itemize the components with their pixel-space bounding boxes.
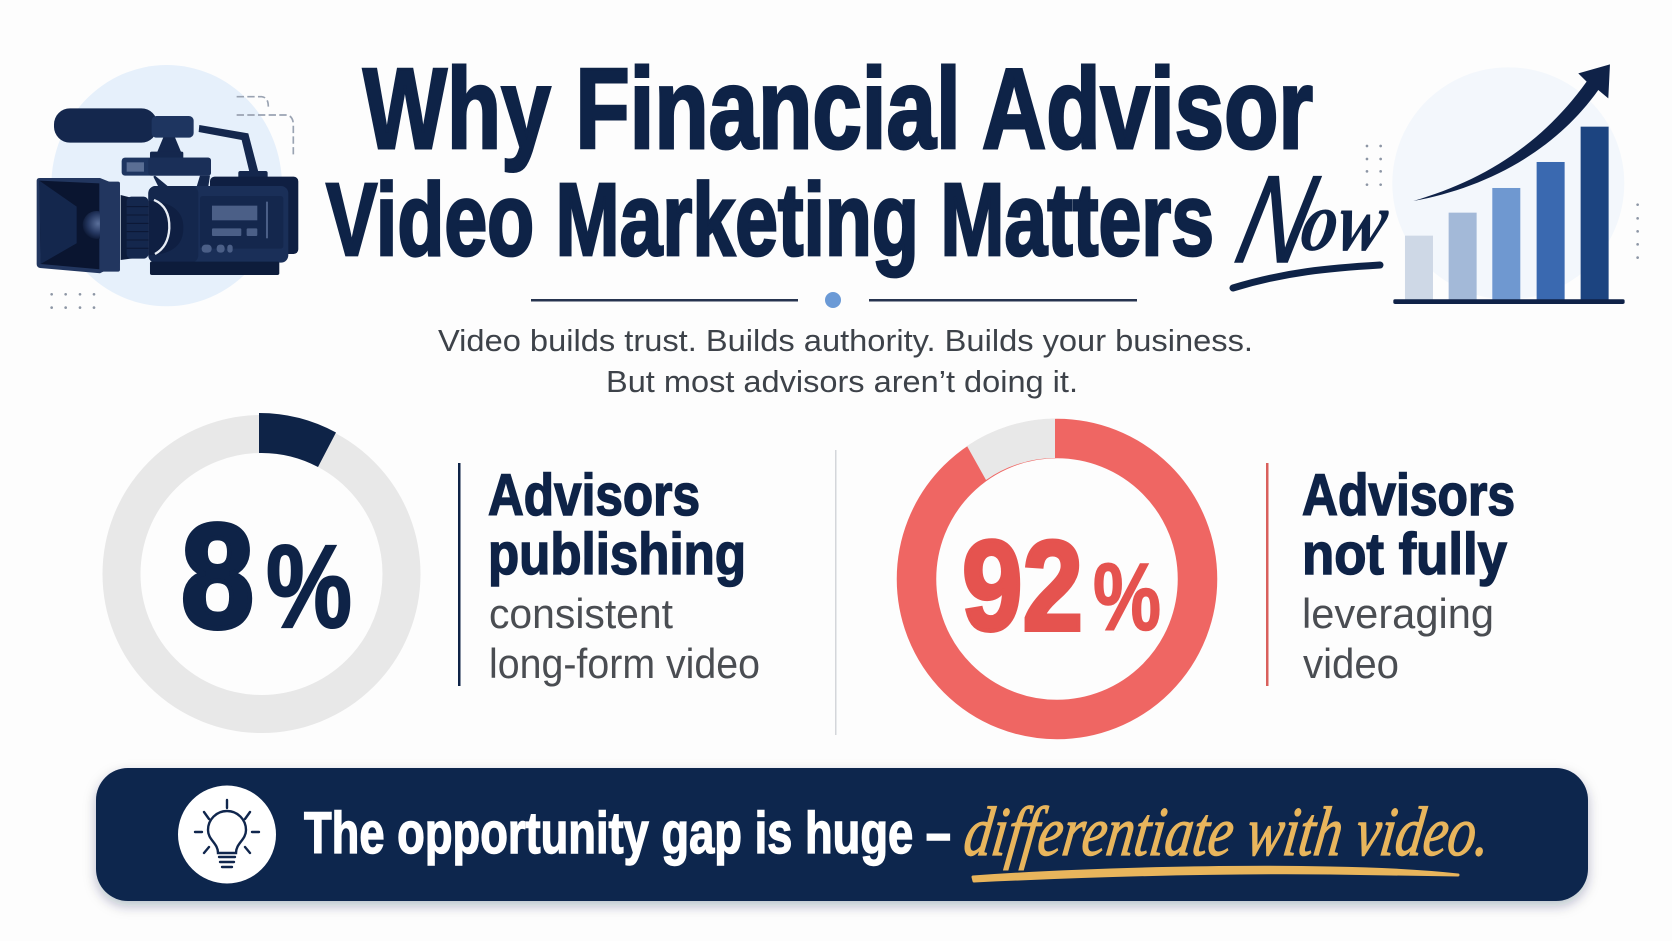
donut: 8%: 8 [181,494,254,659]
donut: 92% [916,418,1198,720]
stat text: advisors publishing: publishing [488,522,746,587]
stat text: advisors publishing: long-form video [489,640,760,687]
subtitle: But most advisors aren’t doing it. [606,364,1078,399]
icon: rising bar chart with arrow [1366,64,1639,304]
stat text: advisors not fully: leveraging [1302,590,1494,637]
callout banner: differentiate with video. [960,793,1496,871]
donut: 92%: 92 [962,515,1083,658]
subtitle [438,323,1253,399]
title: Video Marketing Matters [326,162,1214,277]
subtitle: Video builds trust. Builds authority. Builds your business. [438,323,1253,358]
callout banner: The opportunity gap is huge – [304,801,951,866]
title [326,46,1313,277]
title accent: Now: ow [1295,174,1396,269]
stat text: advisors publishing: consistent [489,590,673,637]
callout banner [96,768,1588,901]
icon: video camera [37,65,298,309]
title divider [531,292,1137,308]
donut: 8% [122,413,402,714]
stat text: advisors publishing [458,463,760,687]
stat text: advisors not fully: not fully [1302,522,1507,587]
title accent: Now: N [1225,150,1328,289]
donut: 8%: % [266,521,352,653]
stat text: advisors publishing: Advisors [488,463,700,528]
icon: light bulb [178,786,276,884]
stat text: advisors not fully: Advisors [1302,463,1515,528]
stat text: advisors not fully: video [1303,640,1399,687]
title: Why Financial Advisor [363,46,1313,173]
donut: 92%: % [1093,544,1161,651]
stat text: advisors not fully [1266,463,1515,687]
